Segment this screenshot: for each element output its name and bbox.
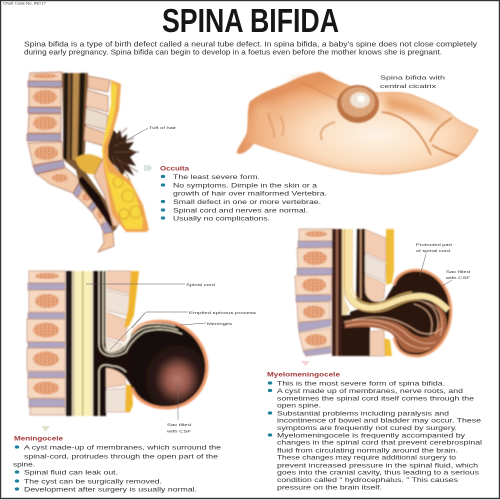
- text block: myelomeningocele: These changes may require additional surgery to: [277, 454, 456, 462]
- intro text: during early pregnancy. Spina bifida can begin to develop in a foetus even before the mother knows she is pregnant.: [24, 50, 442, 56]
- label: tuft of hair: [125, 126, 177, 141]
- text block: meningocele: Development after surgery is usually normal.: [24, 486, 197, 494]
- yellow fat layer: [124, 271, 139, 328]
- intro text: Spina bifida is a type of birth defect called a neural tube defect. In spina bifida, a baby's spine does not close completely: [24, 42, 478, 48]
- text block: occulta: The least severe form.: [173, 174, 260, 181]
- text block: meningocele: The cyst can be surgically removed.: [24, 478, 162, 486]
- skin fat layer: [102, 80, 149, 232]
- label: central cicatrix: Spina bifida with: [380, 76, 445, 82]
- text block: myelomeningocele: prevent increased pressure in the spinal fluid, which: [277, 462, 478, 470]
- text block: meningocele: Spinal fluid can leak out.: [24, 470, 118, 476]
- text block: myelomeningocele: changes in the spinal cord that prevent cerebrospinal: [277, 440, 483, 446]
- text block: occulta: [160, 166, 327, 222]
- labels: myelomeningocele: Protruded part: [416, 242, 453, 247]
- arrow: myelomeningocele marker: [301, 361, 310, 366]
- text block: occulta: Spinal cord and nerves are normal.: [173, 208, 308, 214]
- text block: myelomeningocele: pressure on the brain itself.: [277, 484, 382, 492]
- sac: [350, 270, 451, 356]
- label: tuft of hair: Tuft of hair: [149, 126, 177, 130]
- labels: meningocele: Spinal cord: [186, 282, 215, 287]
- text block: meningocele: spine.: [13, 462, 35, 468]
- text block: meningocele: Meningocele: [14, 436, 63, 442]
- labels: myelomeningocele: of spinal cord: [416, 248, 450, 253]
- intro text: [24, 42, 478, 56]
- spongy bone: [302, 231, 327, 346]
- arrow: meningocele marker: [41, 426, 50, 432]
- illustration: occulta spine cross-section: [27, 72, 149, 252]
- text block: myelomeningocele: Substantial problems including paralysis and: [277, 410, 449, 418]
- text block: myelomeningocele: open spine.: [277, 402, 321, 410]
- vertebral column: [27, 72, 114, 252]
- sac: [93, 271, 207, 416]
- text block: occulta: Small defect in one or more vertebrae.: [173, 199, 321, 206]
- text block: occulta: Occulta: [160, 166, 189, 172]
- text block: myelomeningocele: incontinence of bowel and bladder may occur. These: [277, 418, 481, 424]
- vertebral bodies: [27, 271, 65, 415]
- text block: myelomeningocele: goes into the cranial cavity, thus leading to a serious: [277, 470, 480, 476]
- lesion: [337, 85, 379, 123]
- spongy bone: [33, 74, 103, 219]
- posterior vertebrae: [84, 76, 124, 226]
- illustration: baby's back with lesion: [237, 72, 478, 174]
- label: central cicatrix: [380, 76, 445, 90]
- text block: meningocele: A cyst made-up of membranes, which surround the: [24, 444, 221, 452]
- labels: myelomeningocele: [416, 242, 471, 286]
- cord end yellow mass: [75, 154, 105, 174]
- spinal canal: [332, 229, 342, 356]
- text block: myelomeningocele: [267, 372, 483, 492]
- text block: occulta: Usually no complications.: [173, 216, 270, 222]
- labels: meningocele: Sac filled: [167, 422, 191, 427]
- chart code: Chart Code No. INC17: [3, 2, 46, 6]
- labels: myelomeningocele: with CSF: [446, 275, 471, 280]
- arrow: occulta marker: [144, 165, 152, 171]
- illustration: myelomeningocele: [295, 229, 451, 356]
- text block: myelomeningocele: A cyst made up of membranes, nerve roots, and: [277, 388, 463, 395]
- text block: myelomeningocele: fluid from circulating normally around the brain.: [277, 448, 458, 454]
- spongy bone: [33, 273, 59, 394]
- vertebral bodies: [295, 229, 333, 356]
- posterior vertebrae: [104, 271, 132, 412]
- text block: myelomeningocele: This is the most severe form of spina bifida.: [277, 380, 445, 388]
- text block: myelomeningocele: Myelomeningocele: [267, 372, 340, 378]
- labels: myelomeningocele: Sac filled: [446, 269, 470, 274]
- yellow fat layer: [386, 229, 394, 285]
- text block: meningocele: [13, 436, 221, 494]
- text block: myelomeningocele: condition called " hydrocephalus. " This causes: [277, 477, 459, 484]
- posterior vertebrae: [364, 229, 386, 356]
- label: central cicatrix: central cicatrix: [380, 84, 436, 90]
- protruded spinal cord: [348, 229, 448, 310]
- illustration: meningocele: [27, 271, 207, 416]
- text block: myelomeningocele: Myelomeningocele is frequently accompanied by: [277, 432, 466, 440]
- labels: meningocele: Emptied spinous process: [189, 310, 256, 315]
- title: SPINA BIFIDA: [162, 2, 339, 39]
- text block: myelomeningocele: sometimes the spinal cord itself comes through the: [277, 396, 474, 402]
- text block: occulta: growth of hair over malformed Vertebra.: [173, 190, 327, 198]
- spinal canal: [62, 73, 117, 232]
- text block: occulta: No symptoms. Dimple in the skin or a: [173, 182, 317, 190]
- labels: meningocele: [86, 282, 256, 434]
- labels: meningocele: Meninges: [207, 321, 232, 326]
- labels: meningocele: with CSF: [167, 428, 192, 434]
- text block: meningocele: spinal-cord, protrudes through the open part of the: [24, 454, 218, 460]
- skin folds: [268, 82, 458, 156]
- spinal canal: [66, 271, 72, 416]
- nerve roots: [345, 302, 447, 353]
- hair tuft: [106, 128, 137, 178]
- text block: myelomeningocele: symptoms are frequently not cured by surgery.: [277, 425, 457, 432]
- shadow shading: [386, 96, 446, 126]
